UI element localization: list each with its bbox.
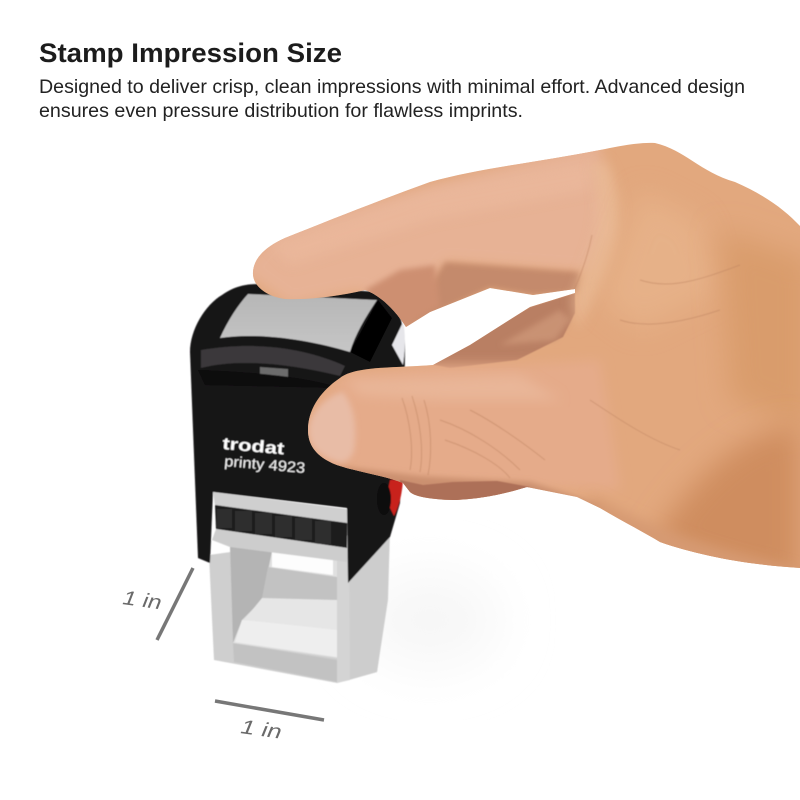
stamp black housing <box>190 284 405 583</box>
middle finger <box>430 293 575 368</box>
index finger tone <box>253 150 604 319</box>
dimension label: width 1 in: 1 in <box>239 716 283 744</box>
thumb underside shade <box>341 466 600 508</box>
thumb tone <box>300 360 620 490</box>
skin wrinkles <box>402 235 740 478</box>
index finger highlight <box>270 160 590 265</box>
web between index and thumb <box>400 262 580 330</box>
index finger underside shade <box>365 265 440 330</box>
stamp <box>190 284 405 683</box>
soft shadow under stamp <box>360 570 500 670</box>
lower hand fold <box>591 504 796 568</box>
stamp side white sliver <box>392 322 405 365</box>
ring finger <box>400 480 530 500</box>
red dial on side <box>386 480 403 516</box>
dimension label: height 1 in: 1 in <box>121 587 163 614</box>
back of hand highlight <box>620 215 702 312</box>
hand <box>240 130 800 590</box>
top lid grey panel <box>220 294 377 352</box>
date band <box>213 492 347 525</box>
thumb highlight <box>356 376 544 398</box>
stamp window <box>230 546 337 658</box>
lid highlights <box>201 346 345 376</box>
knuckle fold highlight <box>572 160 620 330</box>
thumbnail <box>309 392 355 462</box>
logo: trodat: trodat <box>222 434 285 458</box>
right hand tone <box>720 230 800 430</box>
description text <box>39 76 745 122</box>
palm shadow <box>655 423 800 568</box>
description text: ensures even pressure distribution for flawless imprints. <box>39 100 523 122</box>
stamp base <box>209 530 390 683</box>
skin base <box>240 130 800 580</box>
model: printy 4923: printy 4923 <box>224 453 306 477</box>
dimension line: height <box>157 568 193 640</box>
description text: Designed to deliver crisp, clean impressions with minimal effort. Advanced design <box>39 76 745 98</box>
dimension line: width <box>215 701 324 720</box>
title: Stamp Impression Size <box>39 38 342 68</box>
